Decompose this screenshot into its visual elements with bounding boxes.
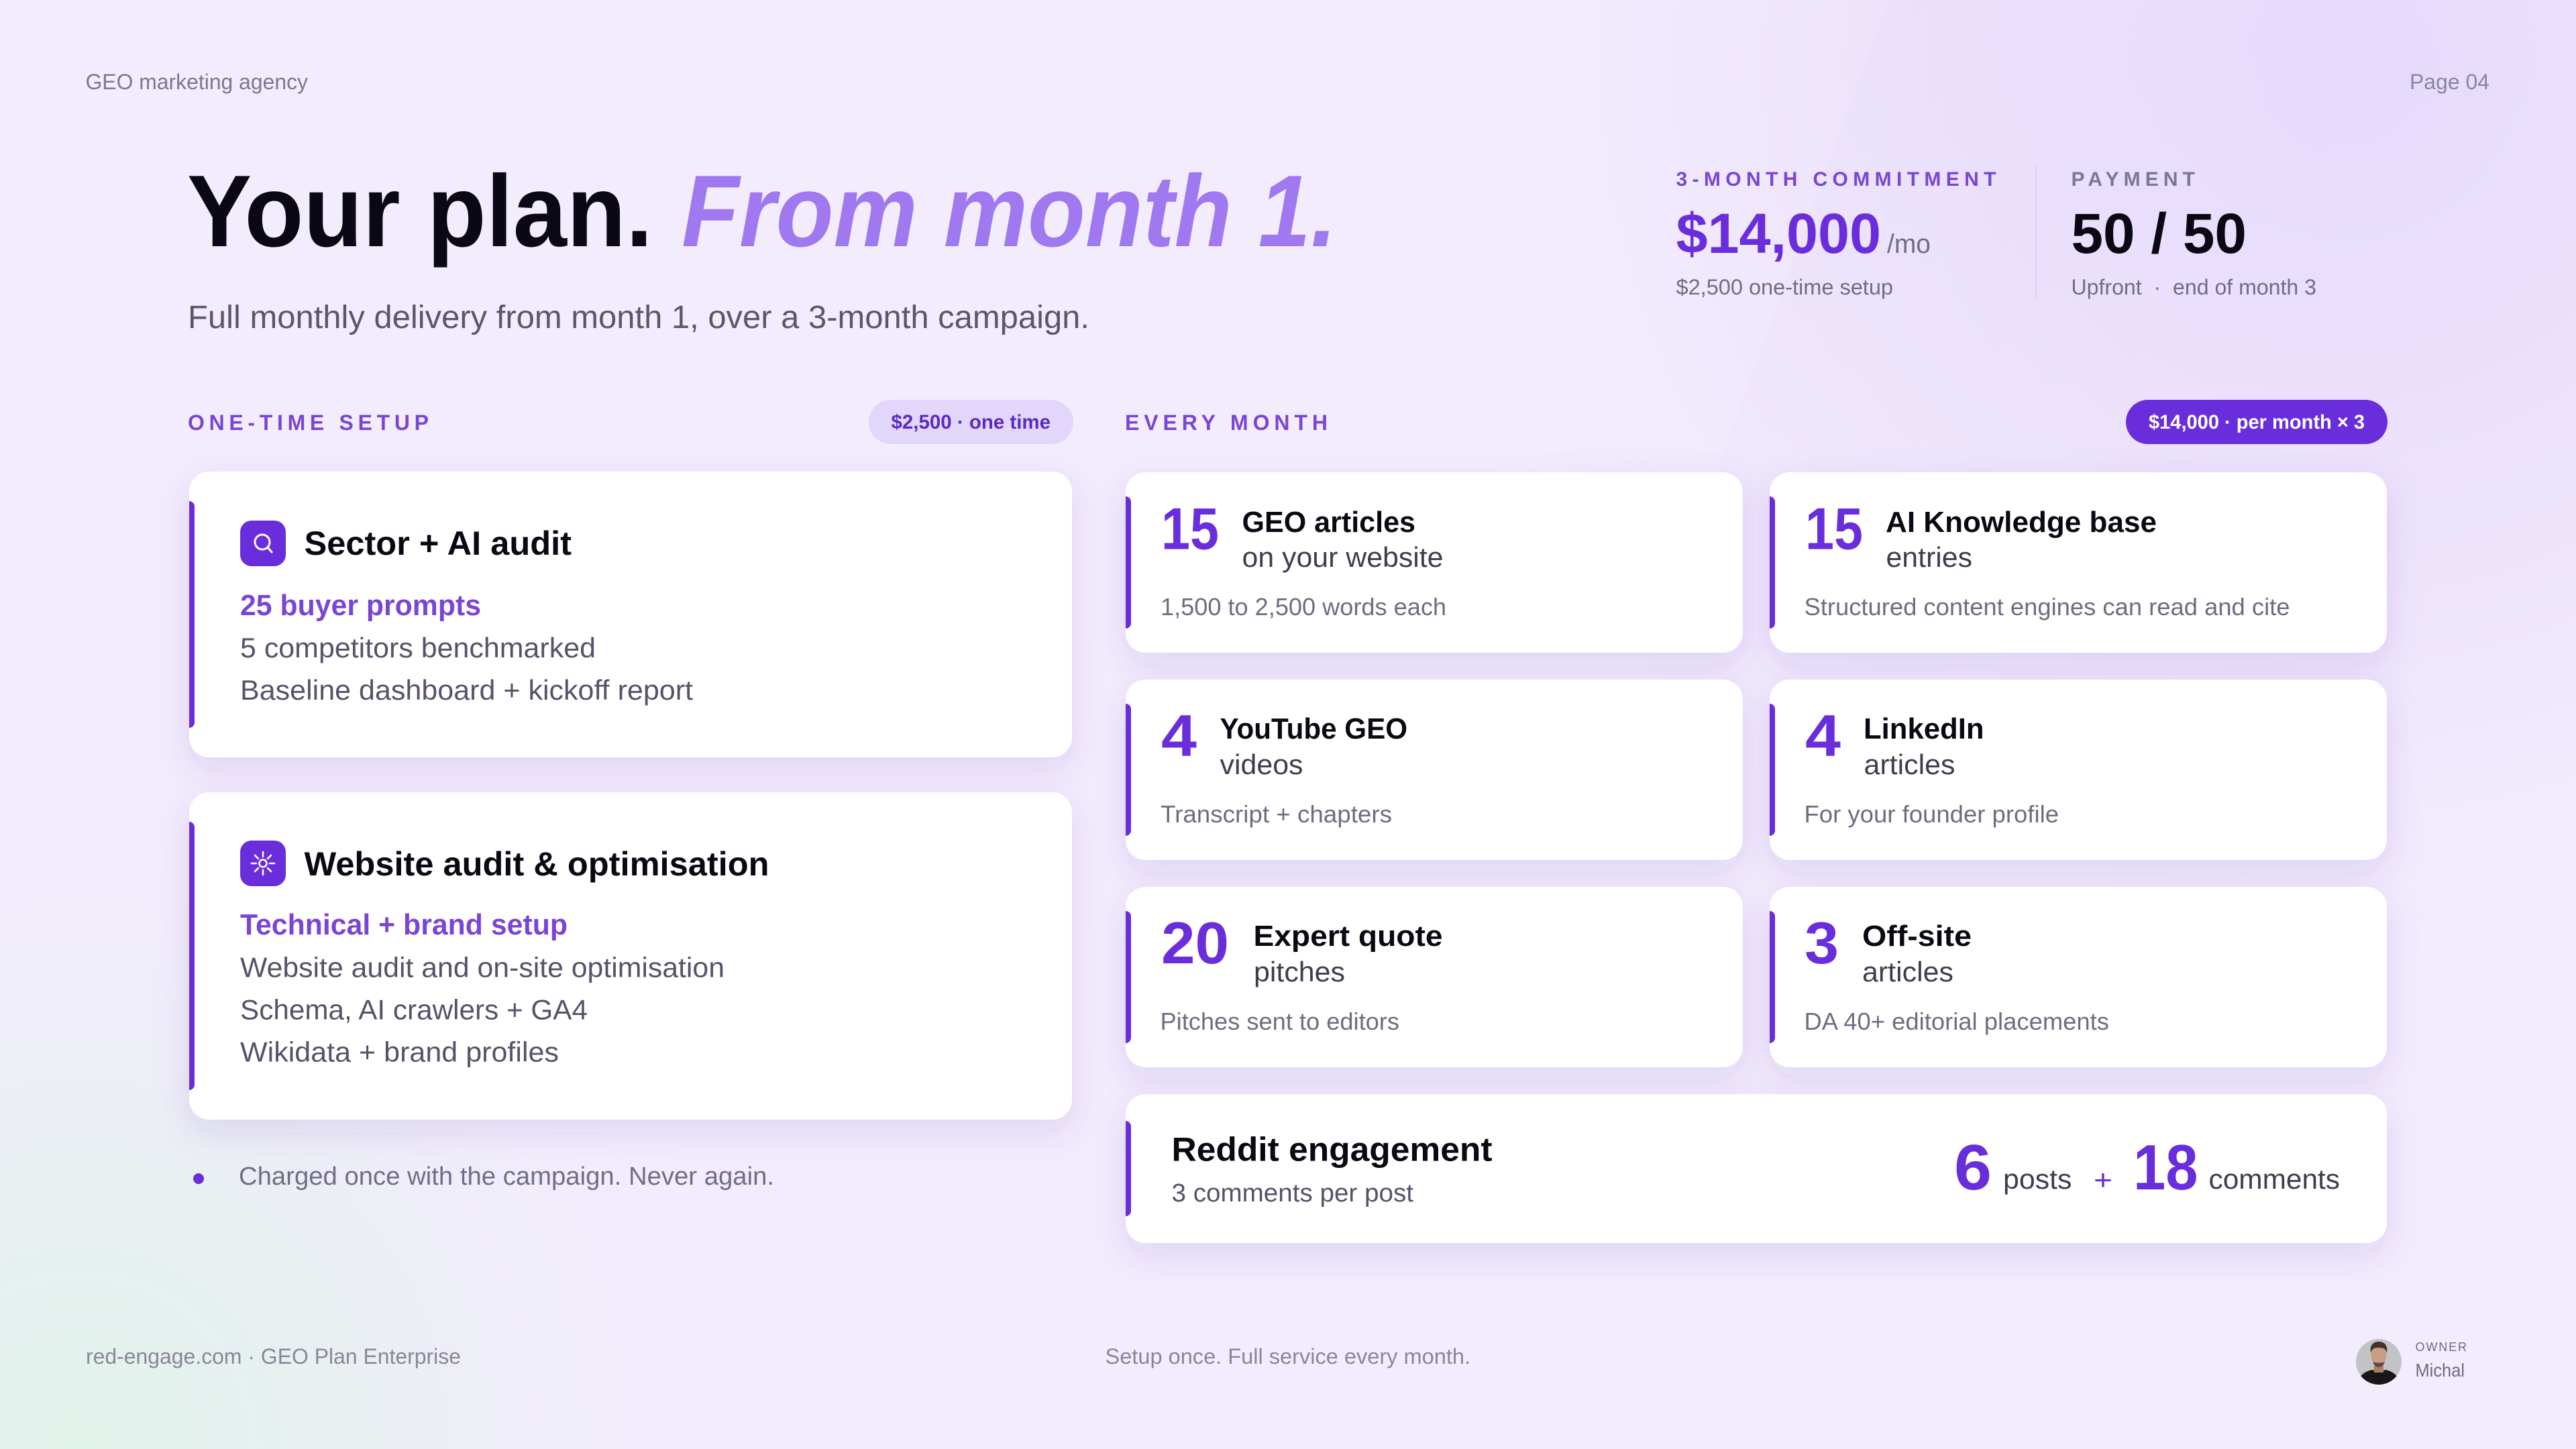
pill: one-time price <box>869 400 1073 444</box>
panel: website audit and optimisation: Schema, AI crawlers + GA4 <box>240 994 588 1025</box>
panel: website audit and optimisation <box>189 792 1072 1120</box>
card: GEO articles: GEO articles <box>1242 506 1415 539</box>
footer: tagline: Setup once. Full service every month. <box>1106 1344 1470 1368</box>
card: AI knowledge base: Structured content engines can read and cite <box>1805 593 2290 621</box>
icon: magnifier <box>240 521 286 566</box>
card: expert quote: Pitches sent to editors <box>1161 1008 1399 1035</box>
card: Reddit engagement: Reddit engagement <box>1171 1131 1493 1169</box>
pill: monthly price: $14,000 · per month × 3 <box>2149 411 2365 433</box>
panel: sector + AI audit: Baseline dashboard + kickoff report <box>240 674 693 706</box>
panel: website audit and optimisation: Wikidata + brand profiles <box>240 1036 559 1068</box>
section heading: one-time setup: ONE-TIME SETUP <box>188 411 429 435</box>
stat: 3-month commitment: 3-MONTH COMMITMENT <box>1676 168 1996 191</box>
card: expert quote: Expert quote <box>1253 920 1442 953</box>
card: Reddit engagement: + <box>2094 1164 2112 1195</box>
owner label <box>2415 1340 2467 1381</box>
stat: 3-month commitment: $14,000 <box>1676 202 1881 265</box>
stat: 3-month commitment <box>1676 168 1996 299</box>
card: YouTube GEO: videos <box>1220 749 1303 780</box>
subtitle: Full monthly delivery from month 1, over a 3-month campaign. <box>188 300 1089 335</box>
card: LinkedIn <box>1770 680 2387 860</box>
card: off-site: Off-site <box>1862 920 1972 953</box>
card: YouTube GEO <box>1126 680 1743 860</box>
pill: monthly price <box>2126 400 2387 444</box>
card: Reddit engagement: comments <box>2208 1163 2340 1195</box>
card: LinkedIn: 4 <box>1805 702 1841 769</box>
card: YouTube GEO: 4 <box>1161 702 1197 769</box>
card: AI knowledge base: AI Knowledge base <box>1886 506 2157 539</box>
pill: one-time price: $2,500 · one time <box>891 411 1051 433</box>
card: Reddit engagement: 18 <box>2133 1132 2198 1203</box>
card: LinkedIn: articles <box>1864 749 1955 780</box>
card: off-site <box>1770 887 2387 1067</box>
card: off-site: articles <box>1862 956 1953 987</box>
icon: owner avatar <box>2356 1339 2402 1385</box>
section heading: every month: EVERY MONTH <box>1125 411 1328 435</box>
card: Reddit engagement <box>1126 1094 2387 1243</box>
card: GEO articles <box>1126 472 1743 653</box>
panel: sector + AI audit: Sector + AI audit <box>305 525 572 562</box>
card: LinkedIn: LinkedIn <box>1864 712 1984 745</box>
card: off-site: DA 40+ editorial placements <box>1805 1008 2109 1035</box>
top label: agency: GEO marketing agency <box>86 70 308 94</box>
card: GEO articles: on your website <box>1242 541 1444 573</box>
title: From month 1. <box>682 154 1337 268</box>
card: YouTube GEO: Transcript + chapters <box>1161 800 1392 828</box>
card: Reddit engagement: 3 comments per post <box>1171 1179 1413 1208</box>
footer: source: red-engage.com · GEO Plan Enterprise <box>86 1344 461 1368</box>
stat: payment <box>2072 168 2316 299</box>
card: AI knowledge base <box>1770 472 2387 653</box>
stat: 3-month commitment: /mo <box>1887 229 1931 259</box>
panel: sector + AI audit: 5 competitors benchmarked <box>240 632 596 663</box>
panel: website audit and optimisation: Website audit & optimisation <box>305 845 769 883</box>
note: charged once: Charged once with the campaign. Never again. <box>239 1163 774 1191</box>
owner label: OWNER <box>2415 1340 2467 1354</box>
card: GEO articles: 1,500 to 2,500 words each <box>1161 593 1446 621</box>
card: Reddit engagement: 6 <box>1954 1132 1992 1203</box>
stat: payment: 50 / 50 <box>2072 202 2247 265</box>
panel: website audit and optimisation: Website audit and on-site optimisation <box>240 951 724 983</box>
card: GEO articles: 15 <box>1161 495 1219 562</box>
title: Your plan. <box>187 154 653 268</box>
card: expert quote: pitches <box>1254 956 1345 987</box>
top label: page number: Page 04 <box>2410 70 2489 94</box>
card: LinkedIn: For your founder profile <box>1805 800 2059 828</box>
panel: sector + AI audit: 25 buyer prompts <box>240 589 481 622</box>
stat: payment: PAYMENT <box>2072 168 2195 191</box>
stat: 3-month commitment: $2,500 one-time setup <box>1676 275 1893 299</box>
card: AI knowledge base: 15 <box>1805 495 1863 562</box>
card: YouTube GEO: YouTube GEO <box>1220 712 1407 745</box>
stat: payment: Upfront · end of month 3 <box>2072 275 2316 299</box>
card: AI knowledge base: entries <box>1886 541 1972 573</box>
card: expert quote <box>1126 887 1743 1067</box>
owner label: Michal <box>2415 1360 2465 1381</box>
card: expert quote: 20 <box>1161 910 1229 976</box>
icon: sun gear <box>240 841 286 886</box>
card: off-site: 3 <box>1805 910 1839 976</box>
panel: website audit and optimisation: Technical + brand setup <box>240 908 568 941</box>
title <box>187 154 1337 268</box>
card: Reddit engagement: posts <box>2003 1163 2072 1195</box>
panel: sector + AI audit <box>189 472 1072 757</box>
